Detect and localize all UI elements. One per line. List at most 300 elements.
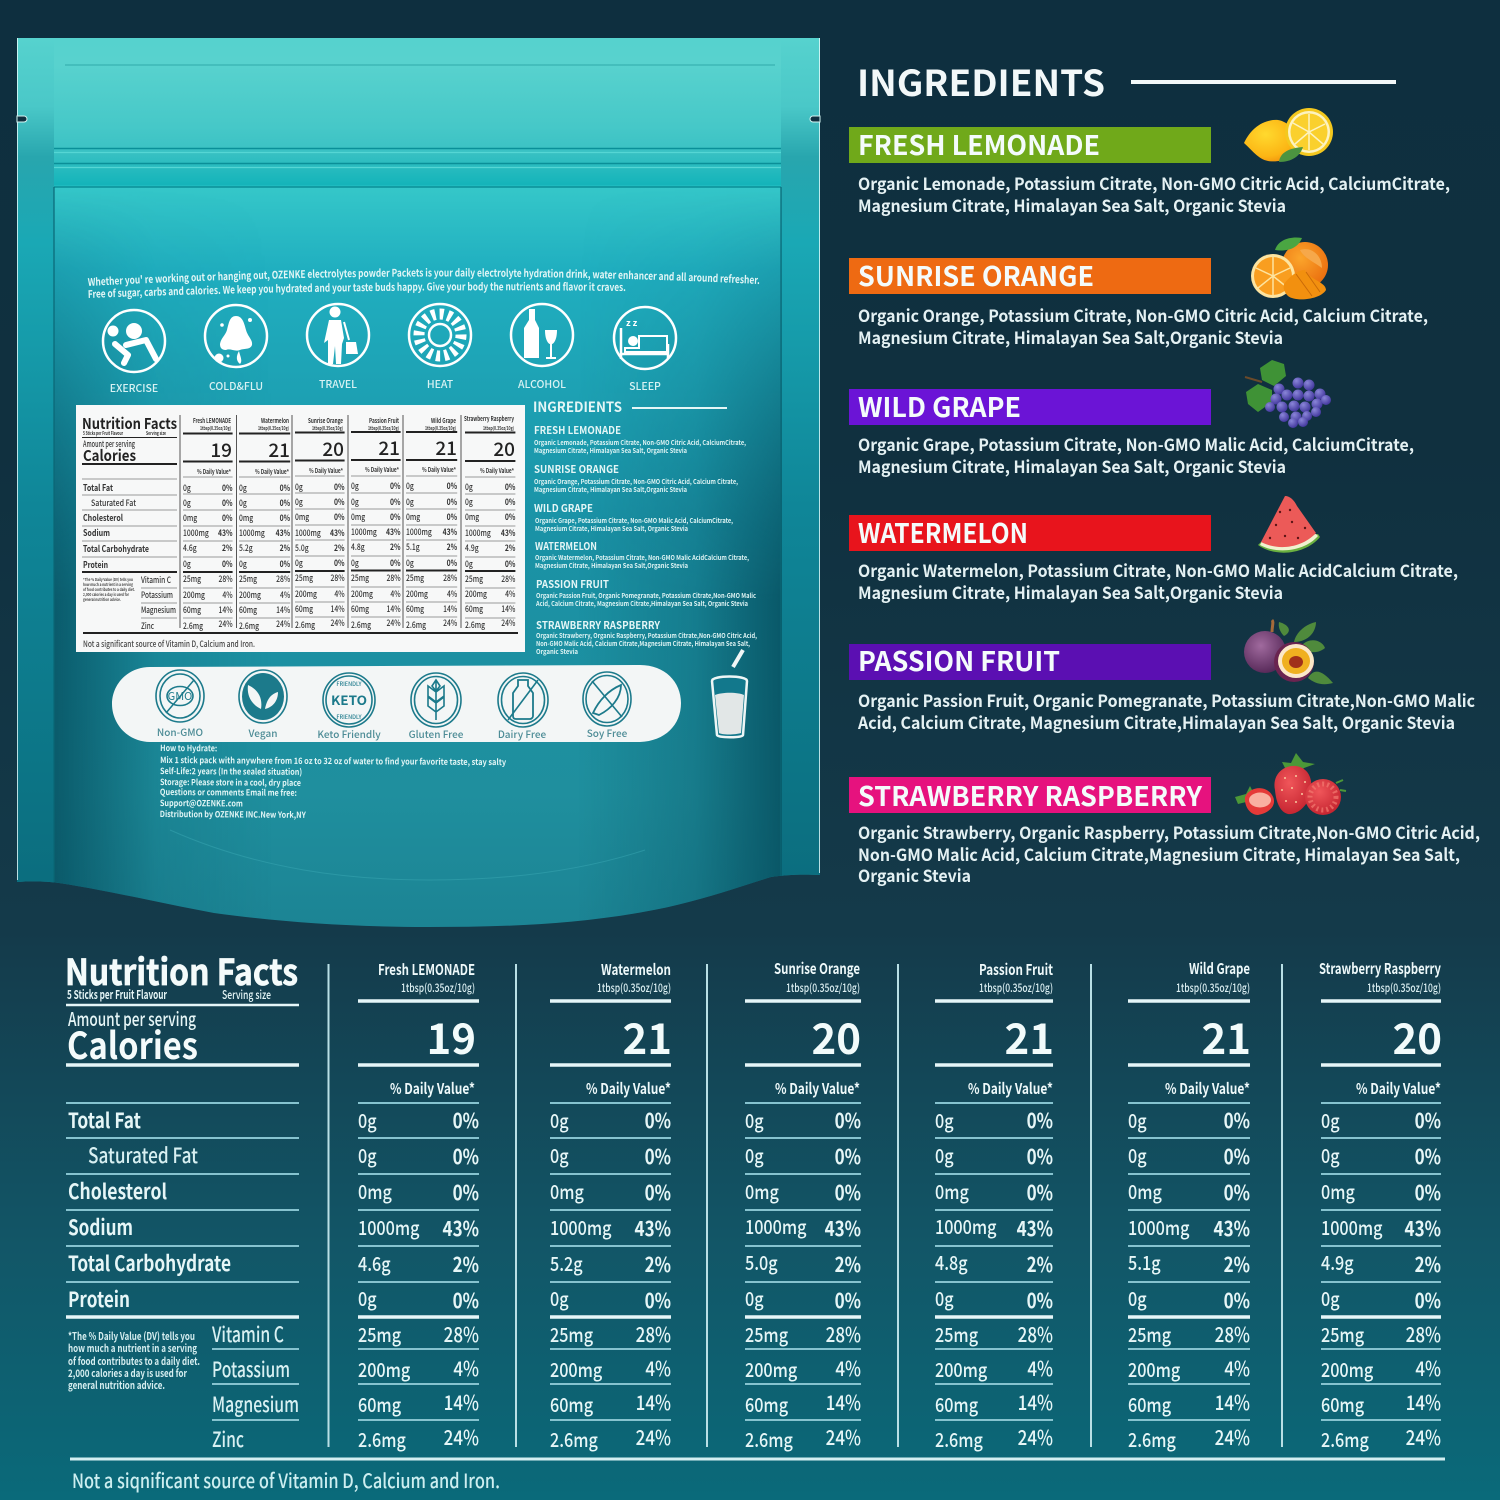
mini column: watermelon: 4%: [280, 589, 290, 601]
panel: fresh lemonade: [849, 108, 1450, 217]
column: sunrise orange: 24%: [826, 1422, 861, 1452]
mini ingredients block: STRAWBERRY RASPBERRY: [536, 618, 661, 633]
mini column: strawberry raspberry: 0%: [505, 558, 516, 570]
mini column: wild grape: 4%: [447, 588, 457, 600]
mini column: wild grape: 5.1g: [406, 541, 420, 553]
mini ingredients block: WILD GRAPE: [534, 501, 593, 516]
mini column: strawberry raspberry: [464, 413, 516, 631]
column: fresh lemonade: 0%: [453, 1285, 479, 1315]
badge: non-GMO: Non-GMO: [157, 724, 203, 739]
column: passion fruit: 1000mg: [935, 1212, 997, 1241]
column: wild grape: 60mg: [1128, 1390, 1172, 1419]
mini label column: Potassium: [141, 589, 173, 601]
mini label column: Amount per serving: [83, 438, 135, 450]
panel: sunrise orange: Organic Orange, Potassium Citrate, Non-GMO Citric Acid, Calcium Citrate,: [858, 302, 1428, 327]
column: sunrise orange: 0g: [745, 1106, 764, 1135]
column: watermelon: 28%: [636, 1319, 671, 1349]
column: passion fruit: 0mg: [935, 1177, 969, 1206]
column: passion fruit: 2%: [1027, 1249, 1053, 1279]
row labels: how much a nutrient in a serving: [68, 1341, 198, 1356]
icon: alcohol: [511, 304, 573, 392]
mini column: passion fruit: 0g: [351, 496, 359, 508]
column: strawberry raspberry: 14%: [1406, 1387, 1441, 1417]
column: strawberry raspberry: 0g: [1321, 1284, 1340, 1313]
icon: heat: HEAT: [427, 377, 454, 392]
icon: sleep: [614, 307, 676, 394]
mini column: fresh lemonade: 1tbsp(0.35oz/10g): [200, 425, 231, 432]
mini label column: Magnesium: [141, 604, 176, 616]
column: fresh lemonade: 60mg: [358, 1390, 402, 1419]
mini label column: Zinc: [141, 620, 154, 632]
mini label column: Cholesterol: [83, 511, 123, 524]
mini column separators: [180, 415, 461, 628]
badge: keto friendly: Keto Friendly: [317, 726, 381, 741]
column: strawberry raspberry: 4%: [1415, 1353, 1441, 1383]
icon: passion fruit: [1244, 620, 1333, 684]
mini column: strawberry raspberry: 20: [493, 435, 515, 462]
mini column: watermelon: [239, 415, 291, 632]
mini ingredients block: Organic Strawberry, Organic Raspberry, Potassium Citrate,Non-GMO Citric Acid,: [536, 630, 757, 640]
icon: exercise: EXERCISE: [110, 381, 158, 396]
column separators: [328, 964, 1282, 1447]
mini column: passion fruit: 4%: [390, 588, 401, 600]
mini column: fresh lemonade: 1000mg: [183, 527, 209, 539]
mini column: fresh lemonade: 0%: [222, 482, 233, 494]
mini column: passion fruit: 60mg: [351, 603, 370, 615]
mini column: sunrise orange: 14%: [330, 603, 345, 615]
column: passion fruit: 0g: [935, 1106, 954, 1135]
mini column: fresh lemonade: % Daily Value*: [197, 466, 231, 476]
mini label column: Calories: [83, 445, 136, 466]
badge: vegan: Vegan: [248, 725, 277, 740]
column: strawberry raspberry: 0g: [1321, 1141, 1340, 1170]
column: wild grape: 0mg: [1128, 1177, 1162, 1206]
mini ingredients block: SUNRISE ORANGE: [534, 462, 619, 477]
mini column: watermelon: 43%: [276, 527, 291, 539]
mini column: watermelon: 60mg: [239, 604, 258, 616]
column: sunrise orange: [745, 958, 861, 1454]
mini column: watermelon: 24%: [276, 618, 290, 630]
column: wild grape: 21: [1201, 1006, 1251, 1067]
mini column: fresh lemonade: 25mg: [183, 573, 202, 585]
mini column: fresh lemonade: 28%: [218, 573, 233, 585]
column: fresh lemonade: Fresh LEMONADE: [378, 959, 475, 980]
intro text: [88, 268, 760, 300]
mini column: fresh lemonade: 19: [210, 436, 232, 463]
icon: cold and flu: COLD&FLU: [209, 379, 263, 394]
column: fresh lemonade: [358, 959, 479, 1454]
mini column: wild grape: 0g: [406, 496, 414, 508]
column: fresh lemonade: 1000mg: [358, 1213, 420, 1242]
column: strawberry raspberry: 20: [1392, 1006, 1442, 1067]
column: passion fruit: 200mg: [935, 1355, 988, 1384]
column: fresh lemonade: 43%: [443, 1213, 479, 1243]
column: watermelon: 21: [622, 1006, 672, 1067]
column: fresh lemonade: 14%: [444, 1387, 479, 1417]
mini column: watermelon: 200mg: [239, 589, 261, 601]
mini column: watermelon: 1000mg: [239, 527, 265, 539]
mini column: wild grape: 25mg: [406, 572, 425, 584]
panel: strawberry raspberry: STRAWBERRY RASPBERRY: [858, 775, 1202, 814]
mini column: sunrise orange: 5.0g: [295, 542, 309, 554]
column: passion fruit: 43%: [1017, 1213, 1053, 1243]
mini column: passion fruit: 0%: [390, 480, 401, 492]
row labels: Magnesium: [212, 1389, 299, 1419]
column: watermelon: 0%: [645, 1177, 671, 1207]
column: passion fruit: 14%: [1018, 1387, 1053, 1417]
column: sunrise orange: 2.6mg: [745, 1425, 793, 1454]
icon: cold and flu: [205, 305, 267, 394]
mini column: passion fruit: 0%: [390, 496, 401, 508]
column: strawberry raspberry: 43%: [1405, 1213, 1441, 1243]
panel: watermelon: WATERMELON: [858, 512, 1028, 551]
mini column: sunrise orange: 0%: [334, 481, 345, 493]
mini column: strawberry raspberry: 4.9g: [465, 542, 479, 554]
column: passion fruit: [935, 959, 1054, 1454]
column: fresh lemonade: 0%: [453, 1141, 479, 1171]
icon: sleep: z z: [626, 316, 638, 329]
column: passion fruit: 21: [1004, 1006, 1054, 1067]
column: sunrise orange: 2%: [835, 1249, 861, 1279]
mini column: fresh lemonade: 0g: [183, 497, 191, 509]
mini column: wild grape: [406, 415, 458, 631]
mini column: watermelon: 28%: [276, 573, 290, 585]
column: wild grape: 0g: [1128, 1284, 1147, 1313]
icon: grapes: [1245, 360, 1331, 428]
badge: keto friendly: KETO: [331, 690, 367, 709]
mini column: watermelon: 0%: [280, 512, 291, 524]
mini column: watermelon: 0%: [280, 558, 291, 570]
column: fresh lemonade: % Daily Value*: [390, 1078, 475, 1099]
column: watermelon: 0mg: [550, 1177, 584, 1206]
mini column: passion fruit: 0g: [351, 480, 359, 492]
column: fresh lemonade: 28%: [444, 1319, 479, 1349]
mini column: wild grape: 2%: [447, 541, 458, 553]
column: sunrise orange: Sunrise Orange: [774, 958, 860, 979]
mini label column: 5 Sticks per Fruit Flavour: [83, 430, 124, 437]
column: fresh lemonade: 4.6g: [358, 1249, 391, 1278]
mini column: sunrise orange: Sunrise Orange: [308, 415, 343, 425]
column: wild grape: Wild Grape: [1189, 958, 1250, 979]
mini column: sunrise orange: 2%: [334, 542, 345, 554]
column: strawberry raspberry: [1319, 958, 1442, 1454]
badge: vegan: [239, 670, 287, 740]
badge: soy free: [583, 672, 631, 740]
row labels: Sodium: [68, 1212, 133, 1242]
mini column: passion fruit: 0%: [390, 511, 401, 523]
mini column: sunrise orange: 0%: [334, 496, 345, 508]
column: strawberry raspberry: 24%: [1406, 1422, 1441, 1452]
mini label column: Total Fat: [83, 481, 113, 494]
column: passion fruit: 28%: [1018, 1319, 1053, 1349]
mini column: strawberry raspberry: 0mg: [465, 511, 480, 523]
panel: watermelon: Magnesium Citrate, Himalayan Sea Salt,Organic Stevia: [858, 579, 1283, 604]
mini column: strawberry raspberry: 28%: [501, 573, 515, 585]
column: sunrise orange: 4%: [835, 1353, 861, 1383]
panel: fresh lemonade: Organic Lemonade, Potassium Citrate, Non-GMO Citric Acid, CalciumCitrate,: [858, 170, 1450, 195]
column: watermelon: 24%: [636, 1422, 671, 1452]
column: strawberry raspberry: 0mg: [1321, 1177, 1355, 1206]
mini column: wild grape: 24%: [443, 617, 457, 629]
mini ingredients block: INGREDIENTS: [533, 397, 622, 417]
panel: fresh lemonade: FRESH LEMONADE: [858, 124, 1100, 163]
mini column: wild grape: 200mg: [406, 588, 428, 600]
mini column: wild grape: 0g: [406, 480, 414, 492]
badge: dairy free: Dairy Free: [498, 726, 547, 741]
column: strawberry raspberry: 0%: [1415, 1105, 1441, 1135]
mini ingredients block: Organic Lemonade, Potassium Citrate, Non-GMO Citric Acid, CalciumCitrate,: [534, 437, 746, 447]
column: fresh lemonade: 19: [426, 1006, 476, 1067]
mini ingredients block: Non-GMO Malic Acid, Calcium Citrate,Magnesium Citrate, Himalayan Sea Salt,: [536, 638, 750, 648]
mini column: fresh lemonade: 4%: [222, 589, 233, 601]
column: fresh lemonade: 1tbsp(0.35oz/10g): [401, 980, 475, 996]
column: wild grape: 43%: [1214, 1213, 1250, 1243]
mini column: fresh lemonade: 43%: [218, 527, 233, 539]
mini column: sunrise orange: 0g: [295, 481, 303, 493]
column: watermelon: [550, 959, 672, 1454]
row labels: of food contributes to a daily diet.: [68, 1354, 200, 1369]
column: fresh lemonade: 25mg: [358, 1320, 402, 1349]
mini column: fresh lemonade: 0g: [183, 558, 191, 570]
mini column: wild grape: 0%: [447, 511, 458, 523]
column: watermelon: 14%: [636, 1387, 671, 1417]
mini column: strawberry raspberry: 24%: [501, 617, 515, 629]
column: watermelon: % Daily Value*: [586, 1078, 671, 1099]
column: strawberry raspberry: 2.6mg: [1321, 1425, 1369, 1454]
column: watermelon: 0g: [550, 1284, 569, 1313]
mini column: wild grape: 14%: [443, 603, 457, 615]
mini column: passion fruit: 1000mg: [351, 526, 377, 538]
column: strawberry raspberry: 1000mg: [1321, 1213, 1383, 1242]
column: wild grape: 5.1g: [1128, 1248, 1161, 1277]
panel: passion fruit: Organic Passion Fruit, Organic Pomegranate, Potassium Citrate,Non-GMO Malic: [858, 687, 1475, 712]
column: passion fruit: 2.6mg: [935, 1425, 983, 1454]
mini ingredients block: Organic Grape, Potassium Citrate, Non-GMO Malic Acid, CalciumCitrate,: [535, 515, 733, 525]
mini label column: Serving size: [146, 430, 166, 437]
mini column: strawberry raspberry: 0%: [505, 496, 516, 508]
column: strawberry raspberry: 0%: [1415, 1285, 1441, 1315]
column: sunrise orange: 60mg: [745, 1390, 789, 1419]
column: sunrise orange: 0%: [835, 1105, 861, 1135]
column: passion fruit: 0%: [1027, 1105, 1053, 1135]
mini column: sunrise orange: 25mg: [295, 572, 314, 584]
mini label column: Vitamin C: [140, 574, 171, 586]
column: sunrise orange: 0mg: [745, 1177, 779, 1206]
column: sunrise orange: 0%: [835, 1141, 861, 1171]
mini column: passion fruit: 28%: [386, 572, 401, 584]
column: strawberry raspberry: 60mg: [1321, 1390, 1365, 1419]
mini column: wild grape: 0g: [406, 557, 414, 569]
mini column: watermelon: 5.2g: [239, 542, 253, 554]
mini ingredients block: Magnesium Citrate, Himalayan Sea Salt, Organic Stevia: [534, 445, 687, 455]
mini column: wild grape: 2.6mg: [406, 619, 427, 631]
mini column: wild grape: 0%: [447, 480, 458, 492]
column: fresh lemonade: 0g: [358, 1284, 377, 1313]
column: wild grape: 4%: [1224, 1353, 1250, 1383]
column: strawberry raspberry: 0%: [1415, 1141, 1441, 1171]
mini ingredients block: [533, 397, 757, 656]
column: wild grape: 25mg: [1128, 1320, 1172, 1349]
column: wild grape: 14%: [1215, 1387, 1250, 1417]
column: watermelon: 25mg: [550, 1320, 594, 1349]
column: passion fruit: 24%: [1018, 1422, 1053, 1452]
mini column: strawberry raspberry: 1000mg: [465, 527, 491, 539]
column: watermelon: 1tbsp(0.35oz/10g): [597, 980, 671, 996]
mini column: passion fruit: 21: [378, 434, 400, 461]
mini column: watermelon: Watermelon: [261, 415, 289, 425]
mini ingredients block: Organic Orange, Potassium Citrate, Non-GMO Citric Acid, Calcium Citrate,: [534, 476, 738, 486]
column: wild grape: 28%: [1215, 1319, 1250, 1349]
row labels: [65, 944, 299, 1454]
mini column: passion fruit: 25mg: [351, 572, 370, 584]
heading: ingredients: INGREDIENTS: [857, 55, 1105, 107]
column: sunrise orange: 28%: [826, 1319, 861, 1349]
panel: watermelon: [849, 496, 1458, 604]
column: sunrise orange: 0g: [745, 1141, 764, 1170]
mini column: watermelon: 0g: [239, 497, 247, 509]
badge: keto friendly: [317, 673, 381, 741]
panel: wild grape: Magnesium Citrate, Himalayan Sea Salt, Organic Stevia: [858, 453, 1286, 478]
mini column: watermelon: 2.6mg: [239, 620, 260, 632]
column: watermelon: 2.6mg: [550, 1425, 598, 1454]
mini column: wild grape: 21: [435, 434, 457, 461]
column: strawberry raspberry: 1tbsp(0.35oz/10g): [1367, 980, 1441, 996]
panel: passion fruit: Acid, Calcium Citrate, Magnesium Citrate,Himalayan Sea Salt, Organic Stevia: [857, 709, 1455, 734]
column: watermelon: 0%: [645, 1105, 671, 1135]
panel: nutrition facts table: [65, 944, 1445, 1494]
panel: watermelon: Organic Watermelon, Potassium Citrate, Non-GMO Malic AcidCalcium Citrate,: [858, 557, 1458, 582]
panel: passion fruit: PASSION FRUIT: [858, 640, 1060, 679]
icon: alcohol: ALCOHOL: [518, 377, 566, 392]
column: passion fruit: Passion Fruit: [979, 959, 1054, 980]
column: strawberry raspberry: 0%: [1415, 1177, 1441, 1207]
mini column: passion fruit: 24%: [386, 617, 401, 629]
mini column: strawberry raspberry: 0%: [505, 481, 516, 493]
badge: keto friendly: FRIENDLY: [336, 713, 363, 721]
column: watermelon: 0%: [645, 1285, 671, 1315]
column: sunrise orange: 25mg: [745, 1320, 789, 1349]
mini label column: Nutrition Facts: [82, 413, 177, 434]
mini column: strawberry raspberry: 0g: [465, 496, 473, 508]
how to hydrate text: Questions or comments Email me free:: [160, 786, 297, 799]
column: fresh lemonade: 0g: [358, 1106, 377, 1135]
column: fresh lemonade: 0mg: [358, 1177, 392, 1206]
mini column: sunrise orange: 1000mg: [295, 527, 321, 539]
column: fresh lemonade: 0g: [358, 1141, 377, 1170]
icon: sleep: SLEEP: [629, 379, 661, 394]
mini column: watermelon: 1tbsp(0.35oz/10g): [258, 425, 289, 432]
mini column: strawberry raspberry: 14%: [501, 603, 515, 615]
column: passion fruit: 0%: [1027, 1141, 1053, 1171]
mini column: watermelon: 0g: [239, 482, 247, 494]
mini column: strawberry raspberry: 2%: [505, 542, 516, 554]
intro text: Whether you' re working out or hanging out, OZENKE electrolytes powder Packets is your daily electrolyte hydration drink, water enhancer and all around refresher.: [88, 268, 760, 286]
mini column: passion fruit: [351, 415, 401, 631]
mini footer note: Not a significant source of Vitamin D, Calcium and Iron.: [83, 638, 255, 650]
mini column: passion fruit: Passion Fruit: [369, 415, 399, 425]
column: passion fruit: 60mg: [935, 1390, 979, 1419]
badge: non-GMO: [156, 670, 204, 739]
column: watermelon: 1000mg: [550, 1213, 612, 1242]
panel: strawberry raspberry: Non-GMO Malic Acid, Calcium Citrate,Magnesium Citrate, Himalayan Sea Salt,: [858, 841, 1460, 866]
column: watermelon: 43%: [635, 1213, 671, 1243]
panel: wild grape: Organic Grape, Potassium Citrate, Non-GMO Malic Acid, CalciumCitrate,: [858, 431, 1414, 456]
footnote: Not a siqnificant source of Vitamin D, Calcium and Iron.: [72, 1465, 500, 1494]
column: watermelon: 4%: [645, 1353, 671, 1383]
column: sunrise orange: 20: [811, 1006, 861, 1067]
row labels: Total Fat: [68, 1105, 141, 1135]
row labels: Total Carbohydrate: [68, 1248, 231, 1278]
mini column: watermelon: 0mg: [239, 512, 254, 524]
panel: wild grape: WILD GRAPE: [858, 386, 1021, 425]
intro text: Free of sugar, carbs and calories. We keep you hydrated and your taste buds happy. Give your body the nutrients and flavor it craves.: [88, 282, 626, 300]
mini ingredients block: Magnesium Citrate, Himalayan Sea Salt, Organic Stevia: [535, 523, 688, 533]
mini column: fresh lemonade: [183, 415, 233, 632]
column: wild grape: 0%: [1224, 1141, 1250, 1171]
mini column: wild grape: 0mg: [406, 511, 421, 523]
column: wild grape: 0%: [1224, 1285, 1250, 1315]
column: watermelon: 0g: [550, 1141, 569, 1170]
mini column: sunrise orange: 0%: [334, 511, 345, 523]
mini column: passion fruit: 0g: [351, 557, 359, 569]
icon: berries: [1235, 753, 1346, 815]
mini column: watermelon: 25mg: [239, 573, 258, 585]
mini column: wild grape: Wild Grape: [431, 415, 456, 425]
column: wild grape: 0%: [1224, 1105, 1250, 1135]
badge: gluten free: [409, 673, 464, 741]
column: strawberry raspberry: 25mg: [1321, 1320, 1365, 1349]
column: strawberry raspberry: 4.9g: [1321, 1248, 1354, 1277]
badge: dairy free: [498, 673, 548, 741]
panel: strawberry raspberry: Organic Stevia: [858, 862, 971, 887]
icon: lemon: [1244, 108, 1333, 162]
mini column: fresh lemonade: Fresh LEMONADE: [193, 415, 231, 425]
mini ingredients block: Organic Watermelon, Potassium Citrate, Non-GMO Malic AcidCalcium Citrate,: [535, 552, 749, 562]
column: wild grape: 2.6mg: [1128, 1425, 1176, 1454]
column: wild grape: [1128, 958, 1251, 1454]
mini column: strawberry raspberry: 43%: [501, 527, 516, 539]
how to hydrate text: How to Hydrate:: [160, 742, 217, 754]
mini ingredients block: Organic Stevia: [536, 646, 578, 656]
column: strawberry raspberry: 0g: [1321, 1106, 1340, 1135]
mini column: fresh lemonade: 24%: [218, 618, 233, 630]
column: wild grape: 1tbsp(0.35oz/10g): [1176, 980, 1250, 996]
column: sunrise orange: 0g: [745, 1284, 764, 1313]
how to hydrate text: Storage: Please store in a cool, dry place: [160, 776, 301, 789]
mini column: fresh lemonade: 0mg: [183, 512, 198, 524]
mini column: fresh lemonade: 0%: [222, 558, 233, 570]
row labels: 2,000 calories a day is used for: [68, 1366, 187, 1381]
row labels: Nutrition Facts: [65, 944, 298, 996]
row labels: Potassium: [212, 1354, 290, 1384]
panel: sunrise orange: [849, 238, 1428, 349]
mini column: wild grape: % Daily Value*: [422, 464, 456, 474]
panel: sunrise orange: Magnesium Citrate, Himalayan Sea Salt,Organic Stevia: [858, 324, 1283, 349]
row labels: Calories: [67, 1016, 198, 1070]
column: fresh lemonade: 0%: [453, 1105, 479, 1135]
row labels: Protein: [68, 1284, 130, 1314]
icon: heat: [409, 304, 471, 392]
column: watermelon: 0g: [550, 1106, 569, 1135]
column: passion fruit: 0%: [1027, 1177, 1053, 1207]
icon: watermelon slice: [1258, 496, 1320, 553]
mini column: passion fruit: 2%: [390, 541, 401, 553]
mini column: strawberry raspberry: Strawberry Raspberry: [464, 413, 514, 423]
mini column: fresh lemonade: 2%: [222, 542, 233, 554]
mini column: sunrise orange: 1tbsp(0.35oz/10g): [312, 425, 343, 432]
mini ingredients block: WATERMELON: [535, 539, 597, 554]
column: wild grape: 2%: [1224, 1249, 1250, 1279]
